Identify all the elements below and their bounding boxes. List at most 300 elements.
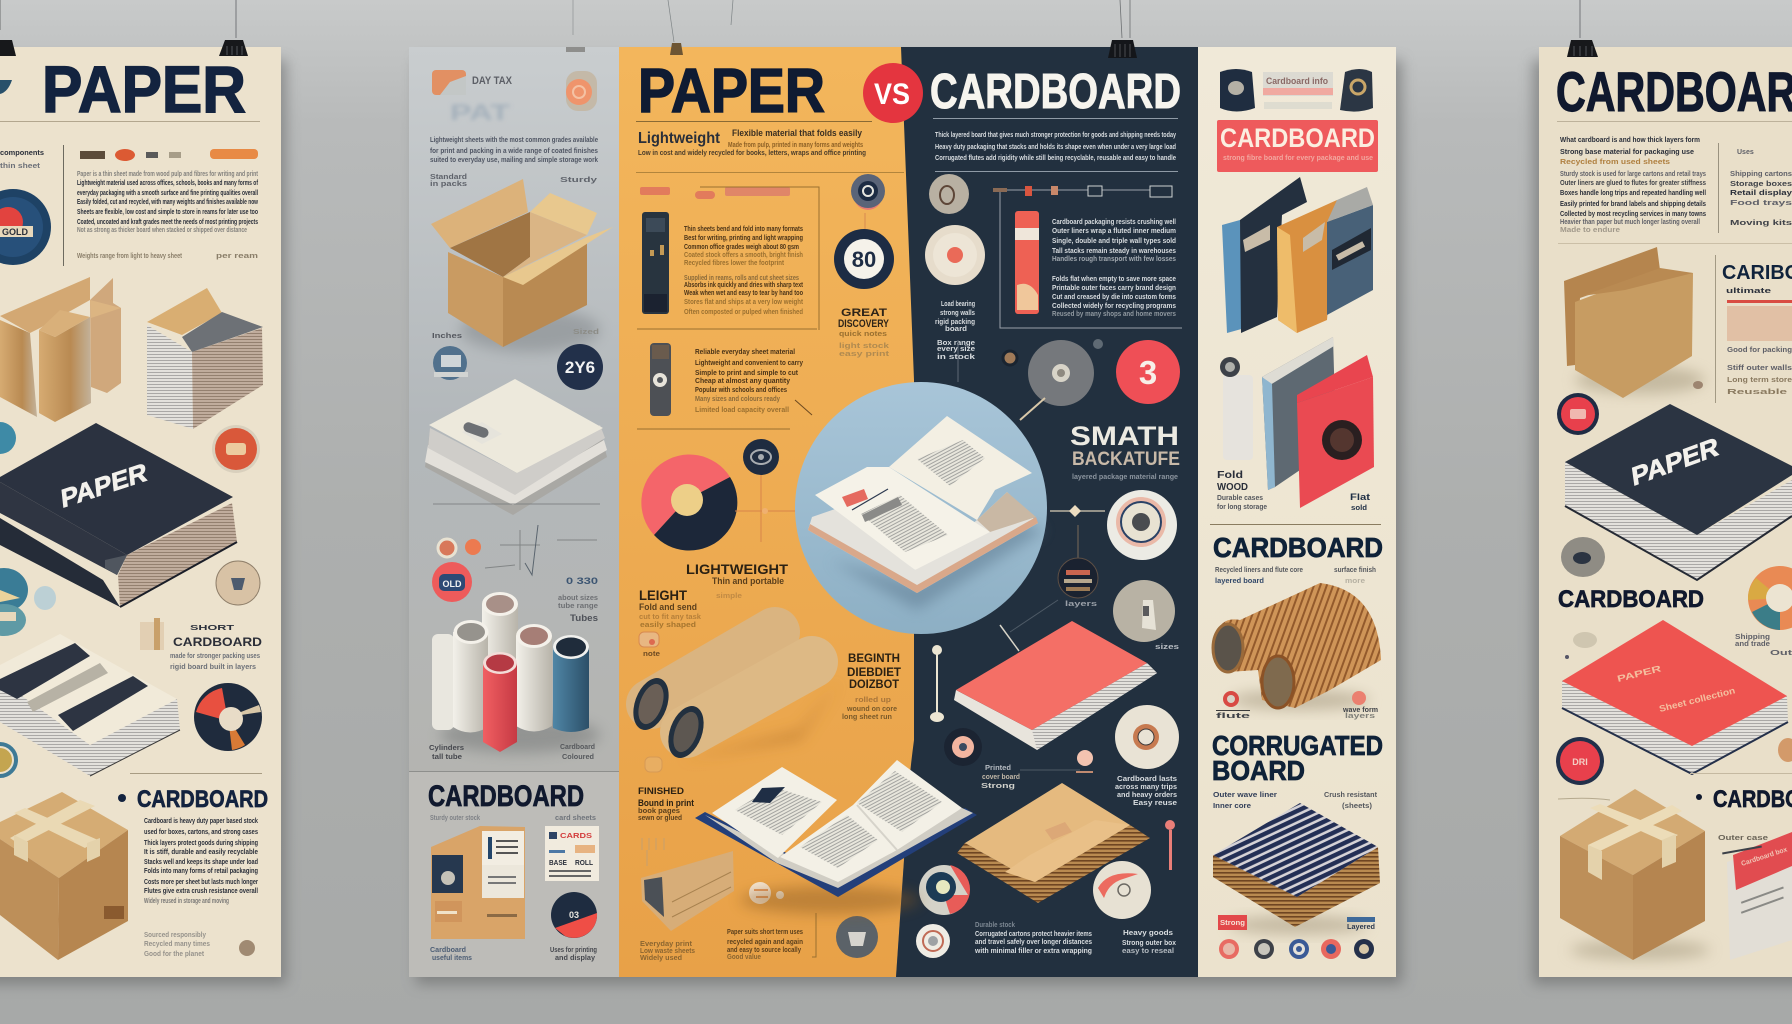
illustration: paper tubes: [432, 592, 600, 753]
text block: bottom orange right: and easy to source locally: [727, 947, 801, 954]
text block: paper description: Lightweight material used across offices, schools, books and many forms of: [77, 180, 258, 187]
heading: faded header: PAT: [450, 100, 511, 125]
icon: grey roll disc: [1028, 340, 1094, 406]
VS badge: [863, 63, 923, 123]
text block: bottom dark left: Corrugated cartons protect heavier items: [975, 931, 1092, 938]
text block: right of rolls: DIEBDIET: [847, 665, 902, 679]
labels: card captions: useful items: [432, 955, 472, 962]
icon: red round badge: DRI: [1572, 757, 1588, 767]
text block: cardboard side note: Long term store: [1727, 377, 1792, 384]
label: box captions: Inches: [432, 333, 462, 340]
text block: bottom orange right: recycled again and again: [727, 939, 803, 946]
text block: right of rolls: BEGINTH: [848, 651, 900, 665]
label: box captions: Sized: [573, 329, 599, 336]
text block: bottom dark left: [974, 922, 1092, 955]
text block: right poster intro: What cardboard is and how thick layers form: [1560, 137, 1700, 144]
text block: cardboard description: Folds into many forms of retail packaging: [144, 868, 258, 875]
text block: small cardboard note: made for stronger packing uses: [170, 653, 260, 660]
text block: grey device notes: Limited load capacity overall: [695, 407, 789, 414]
roll: front: [662, 662, 812, 763]
connector chips: [993, 186, 1182, 328]
right cream panel: [1198, 47, 1396, 977]
text block: cardboard side note: [1722, 262, 1792, 396]
icons: corrugated captions: [1216, 691, 1378, 720]
illustration: open book across panels: [695, 760, 977, 914]
icon: small ring badge: [944, 728, 982, 766]
clip: center: [1108, 0, 1137, 58]
icon: dark header badge: [1220, 69, 1255, 112]
text block: cardboard description: Stacks well and keeps its shape under load: [144, 859, 258, 866]
labels: card captions: Uses for printing: [550, 947, 597, 954]
icons: corrugated captions: layers: [1345, 713, 1375, 720]
text block: paper description: Not as strong as thicker board when stacked or shipped over distance: [77, 227, 247, 234]
icon: dark ornament: [1058, 525, 1098, 608]
icon: grey badge: [836, 916, 878, 958]
icon: small grey dot: [1093, 339, 1103, 349]
text block: cardboard notes: surface finish: [1334, 567, 1376, 574]
pie chart: dark and red disc: [551, 892, 597, 938]
labels: tube captions: [429, 744, 595, 761]
illustration: paper stack: [147, 288, 263, 429]
text block: pamphlet header: [1718, 835, 1768, 854]
text block: red tube notes: Cardboard packaging resists crushing well: [1052, 219, 1176, 226]
text block: center dark note: cover board: [982, 774, 1020, 781]
text block: paper description: Sheets are flexible, low cost and simple to store in reams for later use too: [77, 209, 258, 216]
clip: right poster: [1567, 0, 1598, 57]
illustration: red book: Sheet collection: [1658, 685, 1736, 714]
opening: left: [1213, 624, 1243, 672]
illustration: PAPER book right: [1565, 404, 1792, 580]
text block: binder captions: WOOD: [1217, 482, 1248, 493]
book: right page: [780, 760, 962, 882]
book: lower spine: [0, 518, 120, 607]
book: pages: [118, 503, 237, 607]
book: page block: [808, 492, 1038, 593]
text block: bottom orange left: [640, 941, 695, 962]
text block: lightweight intro: Flexible material that folds easily: [732, 128, 862, 138]
text block: finished: FINISHED: [638, 786, 685, 796]
text block: cream target note: across many trips: [1115, 784, 1177, 791]
labels: tube captions: Cylinders: [429, 745, 464, 752]
text block: right small note: [1735, 634, 1792, 657]
label: chart notes: 0 330: [566, 576, 598, 586]
icon: red tube: [1015, 211, 1039, 314]
text block: lightweight intro: Low in cost and widely recycled for books, letters, wraps and office printing: [638, 150, 866, 157]
illustration: pamphlet: [1727, 832, 1792, 960]
text block: grey device notes: Lightweight and convenient to carry: [695, 360, 803, 367]
text block: gray panel intro: suited to everyday use, mailing and simple storage work: [430, 157, 598, 164]
illustration: paper sheets stack: [425, 379, 607, 515]
text block: device notes: Weak when wet and easy to tear by hand too: [684, 290, 803, 297]
heading: PAPER: PAPER: [42, 52, 246, 126]
text block: bottom orange right: [727, 929, 803, 961]
icon: white blot: [749, 882, 784, 904]
text block: gray panel intro: Sturdy: [560, 177, 597, 184]
strip: lined band: [27, 663, 108, 712]
illustration: red book: PAPER: [1616, 663, 1663, 684]
text block: pamphlet header: Outer case: [1718, 835, 1768, 842]
illustration: coral book: [954, 621, 1157, 750]
text block: cardboard notes: more: [1345, 578, 1365, 585]
book: left page: [712, 767, 837, 858]
text block: dark intro: Thick layered board that gives much stronger protection for goods and shipping needs today: [935, 132, 1176, 139]
text block: cardboard description: [144, 818, 258, 958]
text block: cardboard strip: Sturdy outer stock: [430, 815, 480, 822]
labels: tube captions: tall tube: [432, 754, 462, 761]
text block: cardboard description: Flutes give extra crush resistance overall: [144, 888, 258, 895]
text block: cardboard description: Costs more per sheet but lasts much longer: [144, 879, 258, 886]
text block: leight label: LEIGHT: [639, 587, 687, 603]
illustration: taped box right: [1560, 789, 1710, 960]
icon: blue round badge: [0, 189, 51, 265]
text block: right of rolls: wound on core: [846, 706, 897, 713]
text block: cream target note: and heavy orders: [1117, 792, 1177, 799]
text block: right poster column two: Food trays: [1730, 200, 1792, 207]
tube: blush: [516, 624, 552, 732]
chip: blue tag: [1347, 917, 1375, 931]
icon: cream target: [1115, 705, 1179, 769]
binder: orange: [1277, 200, 1337, 333]
VS badge: VS: [874, 78, 910, 111]
text block: bottom orange left: Widely used: [640, 955, 682, 962]
text block: cardboard strip: [430, 815, 596, 822]
icon: grey disc: [1113, 580, 1175, 642]
text block: cardboard notes: layered board: [1215, 578, 1264, 585]
text block: cardboard side note: Stiff outer walls: [1727, 365, 1792, 372]
tube: white with ring: [1220, 357, 1253, 460]
label: header chip: Cardboard info: [1266, 76, 1328, 86]
illustration: orange folder with cards: [431, 826, 525, 939]
text block: small cardboard note: CARDBOARD: [173, 635, 262, 649]
text block: grey device notes: Popular with schools and offices: [695, 387, 787, 394]
text block: gray panel intro: Lightweight sheets with the most common grades available: [430, 137, 598, 144]
text block: small dark notes: rigid packing: [935, 319, 975, 326]
text block: right small note: and trade: [1735, 641, 1770, 648]
text block: right poster intro: Recycled from used sheets: [1560, 159, 1670, 166]
heading: CORRUGATED BOARD: [1212, 730, 1383, 786]
labels: tube captions: Cardboard: [560, 744, 595, 751]
icon: grey device: [650, 343, 671, 416]
text block: grey device notes: Simple to print and simple to cut: [695, 370, 799, 377]
text block: binder captions: sold: [1351, 505, 1367, 512]
icon: small orange chip: [639, 632, 660, 658]
text block: right poster column two: Retail display: [1730, 190, 1792, 197]
heading: faded header: [450, 75, 513, 125]
text block: cardboard side note: Reusable: [1727, 389, 1787, 396]
illustration: PAPER book right: PAPER: [1630, 433, 1720, 492]
chip: blue tag: Layered: [1347, 924, 1375, 931]
icon: red badge with chip: OLD: [442, 579, 462, 589]
text block: small dark notes: board: [945, 326, 967, 333]
icon: grey disc: [1561, 537, 1605, 577]
label: chart notes: tube range: [558, 603, 598, 610]
banner: CARDBOARD red: strong fibre board for every package and use: [1223, 155, 1373, 162]
text block: cardboard description: Thick layers protect goods during shipping: [144, 840, 258, 847]
box: front: [39, 310, 91, 422]
text block: smath package: SMATH: [1070, 421, 1179, 451]
text block: device notes: Coated stock offers a smooth, bright finish: [684, 252, 803, 259]
label: chart notes: [558, 576, 598, 623]
icon: tan disc: [216, 561, 260, 605]
chip: red tag: Strong: [1220, 920, 1245, 927]
text block: red tube notes: Folds flat when empty to save more space: [1052, 276, 1176, 283]
text block: red tube notes: Single, double and triple wall types sold: [1052, 238, 1176, 245]
text block: right poster intro: [1560, 137, 1706, 234]
text block: right poster intro: Collected by most recycling services in many towns: [1560, 211, 1706, 218]
text block: device notes: Best for writing, printing and light wrapping: [684, 235, 803, 242]
heading: PAPER orange panel: PAPER: [638, 57, 825, 126]
heading: CARDBOARD: CARDBOARD: [137, 786, 268, 813]
clip: left poster: [219, 0, 248, 56]
icons: small teal badges: [0, 422, 56, 776]
icon: brown ring: [1003, 351, 1017, 365]
heading: CARDBOARD white: CARDBOARD: [930, 65, 1181, 119]
text block: device notes: Recycled fibres lower the footprint: [684, 260, 785, 267]
text block: grey device notes: Reliable everyday sheet material: [695, 349, 795, 356]
illustration: PAPER book: PAPER: [60, 458, 148, 514]
text block: paper description: Paper is a thin sheet made from wood pulp and fibres for writing and print: [77, 171, 258, 178]
frame lines: [637, 187, 819, 429]
text block: paper description: Easily folded, cut and recycled, with many weights and finishes available now: [77, 199, 258, 206]
icon: red round badge: [1556, 737, 1604, 785]
icon: ring badge: [851, 174, 885, 210]
text block: dark intro: Heavy duty packaging that stacks and holds its shape even when under a very large load: [935, 144, 1176, 151]
text block: smath package: [1070, 421, 1180, 481]
text block: small dark notes: every size: [937, 346, 975, 353]
text block: leight label: Fold and send: [639, 602, 697, 612]
label: header chip: [1263, 72, 1333, 109]
text block: leight label: cut to fit any task: [639, 614, 701, 621]
text block: grey device notes: [695, 349, 803, 414]
tube: top white: [482, 592, 518, 674]
text block: small dark notes: Box range: [937, 340, 975, 347]
opening: right: [1262, 656, 1294, 708]
binder clips: [0, 0, 1598, 58]
text block: binder captions: Durable cases: [1217, 495, 1263, 502]
right poster: cardboard: [1539, 47, 1792, 977]
icon: teal badge fragment: [0, 80, 12, 94]
text block: smath package: BACKATUFE: [1072, 449, 1180, 470]
text block: leight label: easily shaped: [640, 622, 696, 629]
icons: corrugated captions: flute: [1216, 713, 1250, 720]
text block: great discovery: GREAT: [841, 307, 887, 319]
text block: right poster intro: Boxes handle long trips and repeated handling well: [1560, 190, 1706, 197]
pie chart: small donut: [194, 683, 262, 751]
labels: tube captions: Coloured: [562, 754, 594, 761]
icon: orange round badge: [212, 425, 260, 473]
text block: paper description: everyday packaging with a smooth surface and fine printing qualities overall: [77, 190, 258, 197]
book: upper spine: [0, 482, 127, 575]
heading: CARDBOARD gray panel: CARDBOARD: [428, 780, 584, 813]
illustration: kraft envelope stack: [957, 783, 1150, 903]
strip: dark upper: [0, 643, 90, 699]
text block: lightweight intro: Made from pulp, printed in many forms and weights: [728, 142, 863, 149]
icon: small brown dot: [1693, 381, 1703, 389]
labels: card captions: Cardboard: [430, 947, 466, 954]
heading: CARDBOARD right small: CARDBOARD: [1558, 586, 1704, 613]
label: chart notes: Tubes: [570, 613, 598, 623]
icon: number badge 80: 80: [852, 247, 876, 272]
book: right page: [889, 416, 1032, 520]
illustration: red book: [1562, 620, 1788, 774]
text block: intro column: components: [0, 150, 44, 157]
icon: multicolour badge: [919, 865, 970, 915]
icon: number badge 80: [834, 229, 894, 289]
text block: dark intro: Corrugated flutes add rigidity while still being recyclable, reusable and easy to handle: [935, 155, 1176, 162]
text block: cardboard description: Cardboard is heavy duty paper based stock: [144, 818, 258, 825]
text block: bottom dark left: Durable stock: [975, 922, 1015, 929]
sketch marks area: [433, 504, 600, 575]
pie chart: coral and navy: [641, 455, 737, 551]
text block: device notes: Thin sheets bend and fold into many formats: [684, 226, 803, 233]
illustration: binders row one: [1222, 177, 1373, 333]
text block: right poster column two: Shipping cartons: [1730, 171, 1792, 178]
text block: great discovery: [838, 307, 890, 358]
text block: grey device notes: Many sizes and colours ready: [695, 396, 780, 403]
icon: dark header badge right: [1340, 69, 1373, 112]
text block: finished: Bound in print: [638, 798, 694, 808]
text block: device notes: Supplied in reams, rolls and cut sheet sizes: [684, 275, 799, 282]
text block: bottom orange right: Good value: [727, 954, 761, 961]
icon: pink pin 2: [1165, 820, 1175, 870]
text block: cream target note: Cardboard lasts: [1117, 776, 1177, 783]
text block: lightweight intro: Lightweight: [638, 130, 721, 147]
text block: gray panel intro: for print and packing in a wide range of coated finishes: [430, 148, 598, 155]
text block: finished: [638, 786, 694, 822]
illustration: corrugated stack: [1213, 803, 1380, 934]
tube: red: [483, 652, 517, 752]
text block: right small note: Shipping: [1735, 634, 1770, 641]
text block: lightweight label: [686, 561, 788, 600]
text block: paper description: [77, 171, 258, 260]
text block: finished: sewn or glued: [638, 815, 682, 822]
icon: small sketch mark: [1565, 632, 1597, 659]
text block: right small note: Out: [1770, 650, 1792, 657]
illustration: taped box: [0, 792, 128, 960]
text block: cardboard description: Recycled many times: [144, 941, 210, 948]
text block: right of rolls: rolled up: [855, 697, 891, 704]
text block: paper description: Weights range from light to heavy sheet: [77, 253, 183, 260]
center poster: dark panel: [896, 47, 1198, 977]
text block: corrugated notes: Inner core: [1213, 803, 1251, 810]
tube: blue: [553, 635, 589, 732]
icon: orange rose badge: [566, 71, 597, 111]
text block: bottom dark right: easy to reseal: [1122, 948, 1174, 955]
icon: red badge: [1557, 393, 1599, 435]
text block: red tube notes: Tall stacks remain steady in warehouses: [1052, 248, 1176, 255]
text block: great discovery: quick notes: [839, 331, 887, 338]
icon: red number badge: 3: [1139, 354, 1157, 391]
text block: paper description: Coated, uncoated and kraft grades meet the needs of most printing projects: [77, 219, 258, 226]
text block: small cardboard note: SHORT: [190, 625, 235, 632]
icons: five round badges: [1219, 939, 1374, 959]
clip: orange top: [668, 0, 733, 55]
text block: lightweight intro: [638, 128, 866, 157]
text block: right poster column two: Storage boxes: [1730, 181, 1792, 188]
text block: right of rolls: DOIZBOT: [849, 677, 900, 691]
heading: faded header: DAY TAX: [472, 75, 513, 87]
text block: binder captions: [1217, 470, 1370, 512]
icon: small orange chip: note: [643, 651, 660, 658]
roll: back: [627, 632, 775, 735]
illustration: white data card: ROLL: [575, 860, 594, 867]
text block: right poster column two: Moving kits: [1730, 220, 1792, 227]
text block: lightweight label: simple: [716, 593, 742, 600]
label: box captions: [432, 329, 599, 340]
box: left: [0, 277, 90, 417]
text block: red tube notes: Handles rough transport with few losses: [1052, 256, 1176, 263]
illustration: small kraft box: [641, 851, 734, 931]
icon: red badge with chip: [432, 562, 472, 602]
illustration: open book: [0, 634, 180, 776]
icon: faint chip: [645, 757, 662, 772]
text block: finished: book pages: [638, 808, 680, 815]
text block: small dark notes: Load bearing: [941, 301, 975, 308]
book: dark chip: [752, 787, 785, 803]
text block: cardboard description: Widely reused in storage and moving: [144, 898, 229, 905]
text block: bottom dark left: and travel safely over longer distances: [975, 939, 1092, 946]
strip: dark lower: [58, 676, 148, 731]
text block: device notes: Often composted or pulped when finished: [684, 309, 803, 316]
text block: corrugated notes: [1213, 792, 1378, 810]
text block: small dark notes: in stock: [937, 354, 975, 361]
text block: small cardboard note: [140, 618, 262, 671]
text block: right of rolls: [842, 651, 902, 721]
illustration: PAPER book: [0, 423, 237, 607]
text block: red tube notes: Outer liners wrap a fluted inner medium: [1052, 228, 1176, 235]
text block: corrugated notes: Outer wave liner: [1213, 792, 1277, 799]
icon: swoosh disc: [1093, 861, 1151, 919]
text block: right poster intro: Easily printed for brand labels and shipping details: [1560, 201, 1706, 208]
text block: paper description: per ream: [216, 253, 258, 260]
text block: cardboard description: Good for the planet: [144, 951, 205, 958]
chart: colored donut: [1748, 566, 1792, 630]
illustration: brown box: [1564, 247, 1705, 398]
labels: card captions: and display: [555, 955, 595, 962]
binder: blue: [1222, 177, 1307, 333]
text block: bottom orange right: Paper suits short term uses: [727, 929, 803, 936]
illustration: open paper book: [808, 416, 1045, 610]
book: navy cover: [695, 808, 977, 897]
illustration: white data card: BASE: [549, 860, 567, 867]
labels: card captions: [430, 947, 597, 962]
icon: tan ring badge: [929, 174, 969, 214]
text block: right poster column two: Uses: [1737, 149, 1754, 156]
chip row: [80, 149, 258, 161]
text block: bottom dark right: Heavy goods: [1123, 930, 1173, 937]
illustration: pamphlet: Cardboard box: [1740, 846, 1788, 868]
text block: gray panel intro: in packs: [430, 181, 467, 188]
text block: red tube notes: Reused by many shops and home movers: [1052, 311, 1176, 318]
chip: red tag: [1218, 915, 1247, 930]
text block: right poster intro: Made to endure: [1560, 227, 1620, 234]
text block: red tube notes: [1052, 219, 1176, 318]
icon: dark ornament: layers: [1065, 601, 1097, 608]
text block: device notes: Common office grades weigh about 80 gsm: [684, 244, 799, 251]
text block: cardboard side note: ultimate: [1726, 288, 1771, 295]
text block: right poster intro: Sturdy stock is used for large cartons and retail trays: [1560, 171, 1706, 178]
text block: gray panel intro: [430, 137, 598, 188]
text block: smath package: layered package material range: [1072, 474, 1178, 481]
heading: CORRUGATED BOARD: BOARD: [1212, 755, 1305, 786]
text block: intro column: [0, 150, 44, 170]
icon: small brown dot: [239, 940, 255, 956]
book: cover: [0, 423, 233, 555]
tube: left white: [453, 620, 488, 732]
icon: blue gray disc: [433, 346, 468, 380]
text block: bottom orange left: Everyday print: [640, 941, 693, 948]
icon: small concentric: [916, 924, 950, 958]
